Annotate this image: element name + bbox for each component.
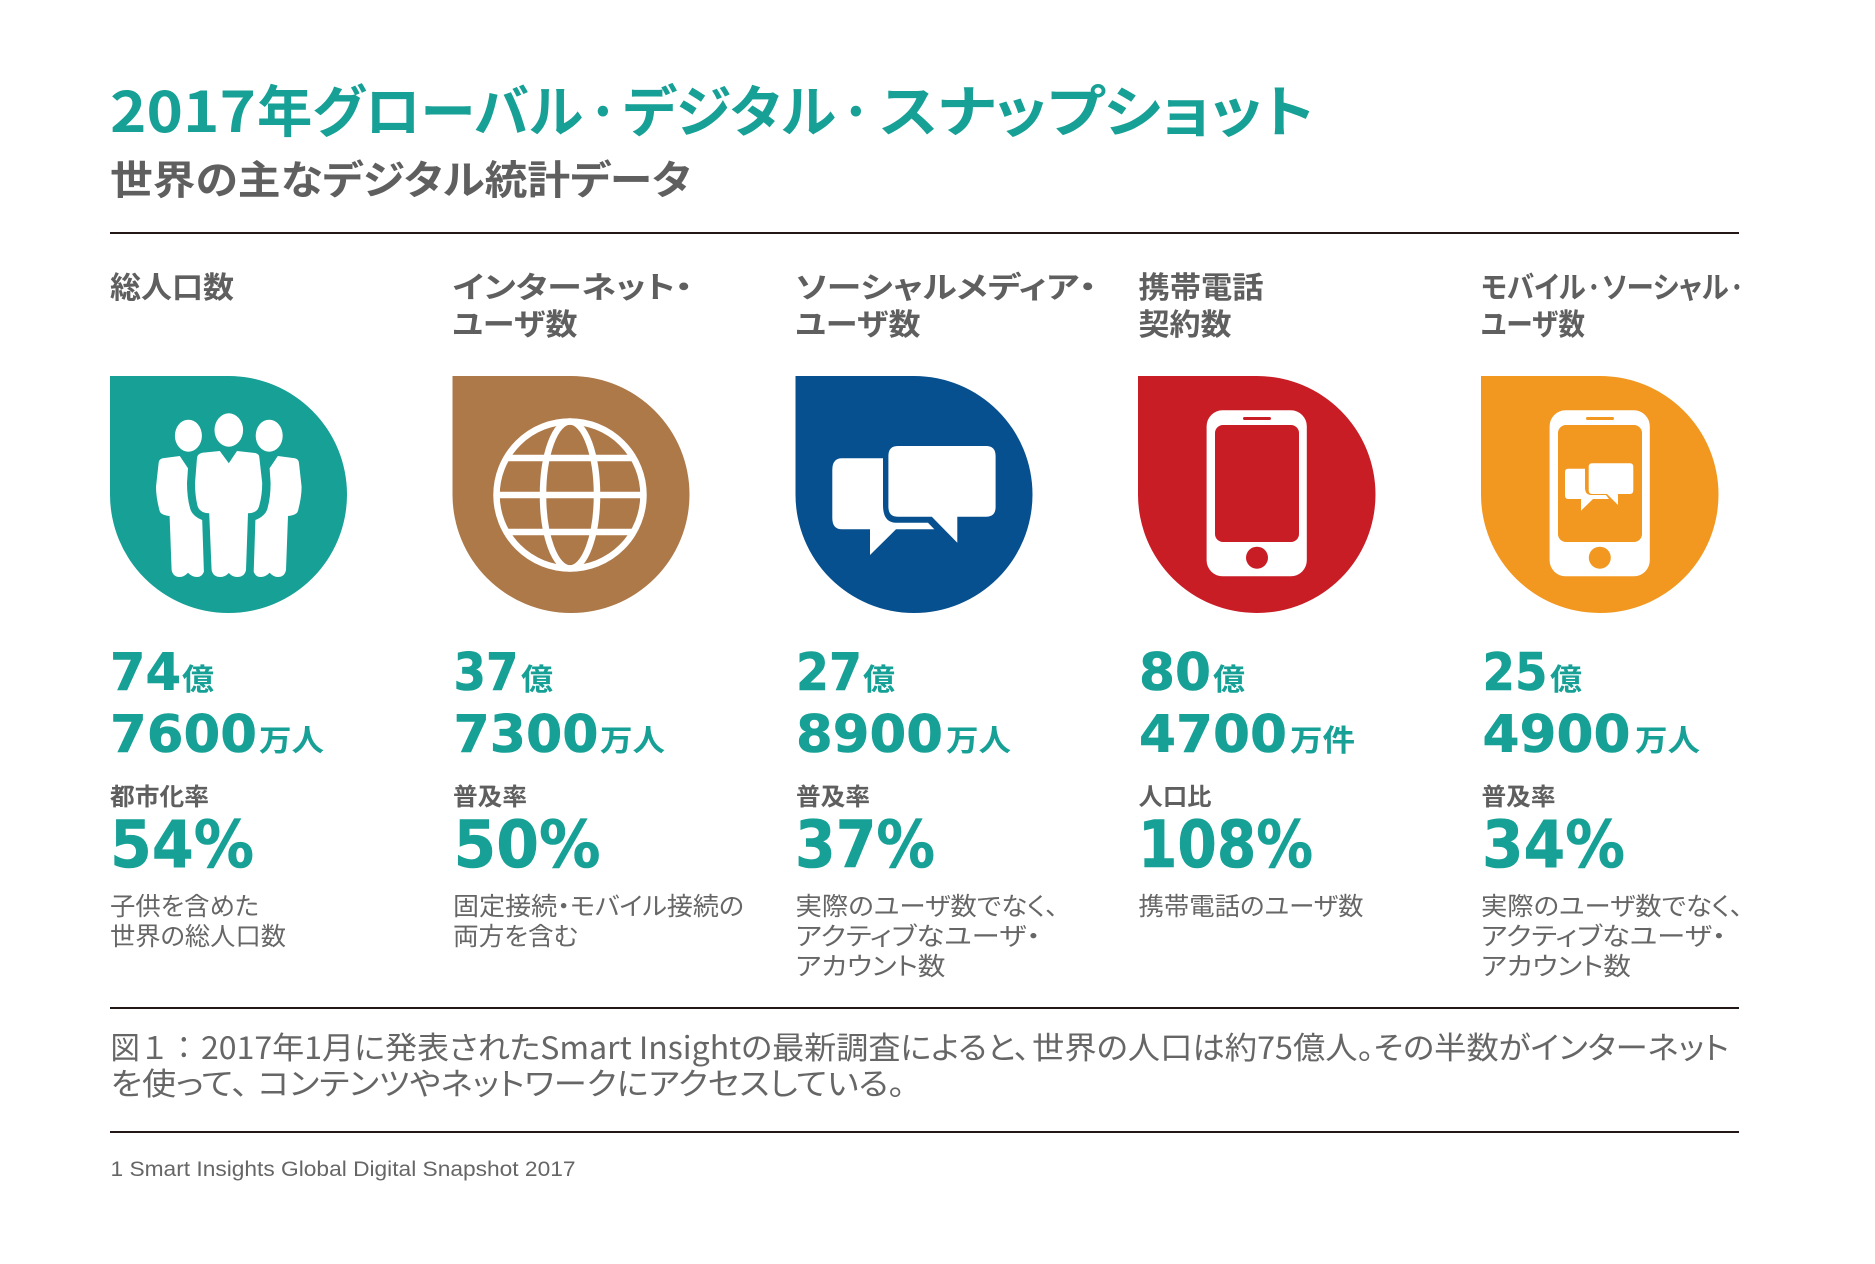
panel: mobile subscriptions [1138, 263, 1376, 923]
percentage: 108% [1138, 808, 1313, 883]
stat: 3.773 billion: 億 [521, 655, 553, 699]
heading: モバイル·ソーシャル· [1481, 263, 1745, 307]
heading [452, 263, 692, 344]
note: アクティブなユーザ・ [1481, 917, 1726, 953]
heading: ユーザ数 [1481, 300, 1585, 344]
label: 都市化率 [110, 777, 209, 812]
stat: 2.789 billion: 27 [796, 643, 862, 703]
note: アカウント数 [796, 947, 946, 983]
stat: 2.549 billion: 億 [1550, 655, 1582, 699]
stat: 3.773 billion: 37 [454, 643, 518, 703]
stat: 2.549 billion: 25 [1482, 643, 1548, 703]
note: 固定接続・モバイル接続の [453, 887, 744, 923]
figure caption: 2017年1月に発表されたSmart Insightの最新調査によると、 [201, 1023, 1030, 1068]
title: · [586, 68, 620, 149]
icon: phone with speech bubbles [1481, 376, 1718, 613]
panel: total population [110, 263, 347, 953]
stat: 7.476 billion: 万人 [259, 716, 324, 760]
panel: mobile social users [1481, 263, 1745, 983]
note: 世界の総人口数 [110, 917, 286, 953]
heading [796, 263, 1096, 344]
stat: 2.549 billion: 4900 [1482, 705, 1630, 765]
label: 普及率 [796, 777, 870, 812]
label: 人口比 [1138, 777, 1212, 812]
panel: internet users [452, 263, 744, 953]
percentage: 54% [110, 808, 254, 883]
stat: 7.476 billion: 7600 [110, 705, 257, 765]
heading: 総人口数 [110, 263, 234, 307]
note: アカウント数 [1481, 947, 1631, 983]
note [453, 887, 744, 953]
heading: 携帯電話 [1138, 263, 1264, 307]
stat: 3.773 billion [454, 643, 665, 765]
stat: 2.789 billion: 8900 [796, 705, 943, 765]
figure caption [110, 1023, 1729, 1104]
percentage: 34% [1482, 808, 1625, 883]
heading [1481, 263, 1745, 344]
stat: 2.549 billion: 万人 [1635, 716, 1700, 760]
stat: 7.476 billion: 億 [182, 655, 214, 699]
stat: 2.789 billion: 万人 [946, 716, 1011, 760]
figure caption: 図１： [110, 1023, 198, 1068]
heading: ユーザ数 [452, 300, 578, 344]
figure caption: を使って、 [110, 1059, 248, 1104]
icon: speech bubbles [796, 376, 1032, 613]
stat: 8.047 billion: 80 [1139, 643, 1211, 703]
footnote: 1 Smart Insights Global Digital Snapshot 2017 [110, 1158, 576, 1181]
stat: 2.549 billion [1482, 643, 1700, 765]
figure caption: コンテンツやネットワークにアクセスしている。 [258, 1059, 905, 1104]
title: デジタル [623, 68, 836, 149]
title: · [839, 68, 873, 149]
icon: phone [1138, 376, 1376, 613]
stat: 3.773 billion: 万人 [600, 716, 665, 760]
icon: people [110, 376, 347, 613]
label: 普及率 [453, 777, 527, 812]
label: 普及率 [1482, 777, 1556, 812]
stat: 7.476 billion: 74 [110, 643, 181, 703]
stat: 8.047 billion: 億 [1213, 655, 1245, 699]
title: 年グローバル [257, 68, 583, 149]
panel: social media users [795, 263, 1096, 983]
note: 実際のユーザ数でなく、 [1481, 887, 1743, 923]
percentage: 50% [454, 808, 600, 883]
note: 両方を含む [453, 917, 578, 953]
note: アクティブなユーザ・ [796, 917, 1040, 953]
stat: 8.047 billion: 万件 [1290, 716, 1355, 760]
heading: 契約数 [1138, 300, 1232, 344]
note: 携帯電話のユーザ数 [1138, 887, 1364, 923]
heading: ソーシャルメディア・ [796, 263, 1096, 307]
title: スナップショット [880, 68, 1314, 149]
icon: globe [452, 376, 690, 613]
stat: 8.047 billion [1139, 643, 1355, 765]
note [1481, 887, 1743, 983]
stat: 7.476 billion [110, 643, 324, 765]
stat: 3.773 billion: 7300 [454, 705, 598, 765]
figure caption: 世界の人口は約75億人。その半数がインターネット [1032, 1023, 1729, 1068]
note [796, 887, 1058, 983]
heading: インターネット・ [452, 263, 692, 307]
heading [1138, 263, 1264, 344]
title [110, 68, 1314, 149]
stat: 2.789 billion [796, 643, 1011, 765]
stat: 2.789 billion: 億 [863, 655, 895, 699]
stat: 8.047 billion: 4700 [1139, 705, 1287, 765]
heading: ユーザ数 [796, 300, 920, 344]
note: 子供を含めた [110, 887, 259, 923]
subtitle: 世界の主なデジタル統計データ [110, 148, 691, 206]
note [110, 887, 286, 953]
title: 2017 [110, 68, 256, 149]
note: 実際のユーザ数でなく、 [796, 887, 1058, 923]
percentage: 37% [795, 808, 935, 883]
